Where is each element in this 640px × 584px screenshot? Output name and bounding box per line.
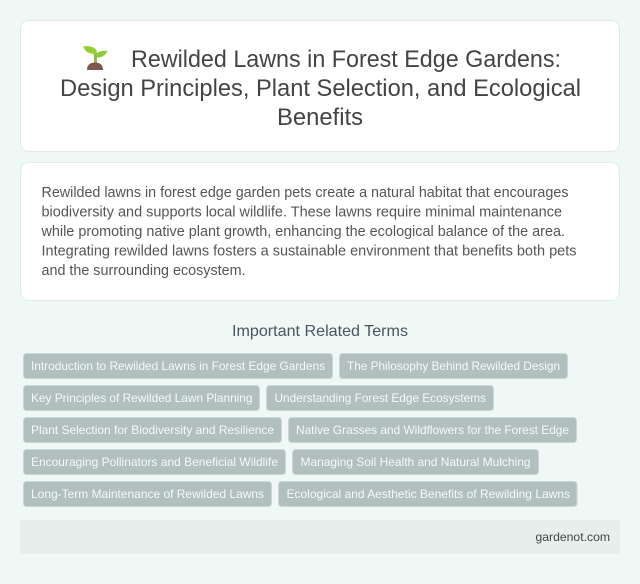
tag: soil health — [292, 450, 538, 474]
tag: native grasses — [288, 418, 576, 442]
text block: description: biodiversity and supports local wildlife. These lawns require minimal maintenance — [42, 204, 562, 220]
panel: description card — [20, 162, 620, 300]
tag list: related terms — [24, 354, 577, 506]
panel: title card — [20, 20, 620, 152]
heading: title: Benefits — [277, 104, 363, 131]
tag: pollinators — [24, 450, 286, 474]
tag: forest edge ecosystems: Understanding Forest Edge Ecosystems — [274, 391, 486, 405]
text block: description: Rewilded lawns in forest edge garden pets create a natural habitat that encourages — [42, 185, 568, 201]
tag: soil health: Managing Soil Health and Natural Mulching — [300, 455, 530, 469]
icon: seedling — [83, 46, 108, 70]
tag: philosophy: The Philosophy Behind Rewilded Design — [347, 359, 560, 373]
tag: introduction: Introduction to Rewilded Lawns in Forest Edge Gardens — [31, 359, 325, 373]
tag: native grasses: Native Grasses and Wildflowers for the Forest Edge — [296, 423, 569, 437]
tag: introduction — [24, 354, 332, 378]
tag: forest edge ecosystems — [266, 386, 494, 410]
text block: description: Integrating rewilded lawns fosters a sustainable environment that benefits both pets — [42, 244, 576, 260]
tag: benefits — [278, 482, 577, 506]
text block: description — [40, 185, 576, 279]
text block: description: and the surrounding ecosystem. — [42, 263, 246, 279]
tag: pollinators: Encouraging Pollinators and Beneficial Wildlife — [31, 455, 278, 469]
tag: maintenance: Long-Term Maintenance of Rewilded Lawns — [31, 487, 264, 501]
heading: title: Design Principles, Plant Selection, and Ecological — [60, 75, 581, 102]
tag: plant selection — [24, 418, 282, 442]
tag: plant selection: Plant Selection for Biodiversity and Resilience — [31, 423, 274, 437]
tag: philosophy — [340, 354, 568, 378]
text block: description: while promoting native plant growth, enhancing the ecological balance of the area. — [40, 224, 565, 240]
tag: key principles: Key Principles of Rewilded Lawn Planning — [31, 391, 252, 405]
heading: title: Rewilded Lawns in Forest Edge Gardens: — [131, 46, 561, 73]
tag: benefits: Ecological and Aesthetic Benefits of Rewilding Lawns — [286, 487, 570, 501]
tag: key principles — [24, 386, 260, 410]
footer: site name: gardenot.com — [536, 530, 610, 544]
tag: maintenance — [24, 482, 272, 506]
heading: important related terms: Important Related Terms — [232, 323, 408, 340]
heading: title — [60, 46, 581, 131]
footer bar — [20, 520, 620, 554]
